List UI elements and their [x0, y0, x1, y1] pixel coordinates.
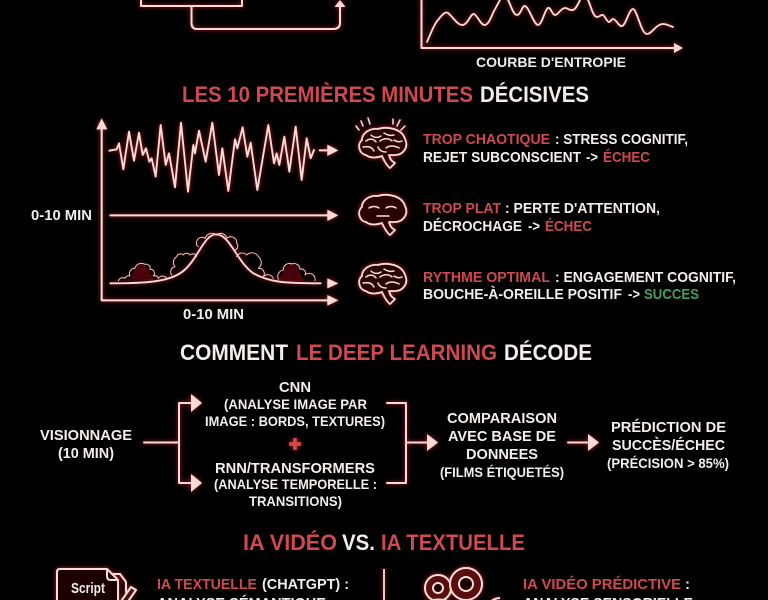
- icon: stressed brain: [356, 118, 406, 168]
- block: comparaison: [440, 410, 564, 480]
- block: rnn/transformers: [214, 460, 377, 509]
- block: cnn: IMAGE : BORDS, TEXTURES): [205, 413, 385, 429]
- text: trop plat: ->: [528, 218, 540, 235]
- text: rythme optimal: : ENGAGEMENT COGNITIF,: [555, 269, 736, 286]
- text: trop plat: : PERTE D'ATTENTION,: [505, 200, 660, 217]
- heading: ia vidéo vs. ia textuelle: VS.: [342, 530, 375, 555]
- text: trop chaotique: : STRESS COGNITIF,: [555, 131, 688, 148]
- icon: film camera: [425, 568, 500, 600]
- text: ia textuelle: [157, 576, 349, 600]
- axis label: courbe d'entropie: COURBE D'ENTROPIE: [476, 54, 626, 70]
- text: trop chaotique: ÉCHEC: [603, 149, 650, 166]
- block: prédiction: PRÉDICTION DE: [611, 419, 726, 436]
- chart lines: [96, 118, 338, 306]
- text: trop plat: TROP PLAT: [423, 200, 501, 217]
- flow: visionnage input: VISIONNAGE: [40, 427, 132, 444]
- flow: visionnage input: [40, 427, 132, 462]
- icon: engaged brain: [359, 264, 406, 304]
- text: ia textuelle: IA TEXTUELLE: [157, 576, 257, 593]
- heading: les 10 premières minutes décisives: LES 10 PREMIÈRES MINUTES: [182, 82, 473, 107]
- block: rnn/transformers: (ANALYSE TEMPORELLE :: [214, 476, 377, 492]
- plus sign: [289, 438, 301, 450]
- text: trop plat: [423, 200, 660, 235]
- heading: comment le deep learning décode: DÉCODE: [504, 340, 592, 365]
- block: prédiction: (PRÉCISION > 85%): [607, 455, 729, 471]
- text: rythme optimal: RYTHME OPTIMAL: [423, 269, 550, 286]
- heading: comment le deep learning décode: LE DEEP LEARNING: [296, 340, 497, 365]
- text: ia textuelle: (CHATGPT) :: [262, 576, 349, 593]
- heading: ia vidéo vs. ia textuelle: [243, 530, 525, 555]
- block: rnn/transformers: TRANSITIONS): [249, 493, 342, 509]
- chart: rhythm curves over 0-10 min: [31, 118, 338, 323]
- text: ia vidéo prédictive: :: [685, 576, 690, 593]
- block: rnn/transformers: RNN/TRANSFORMERS: [215, 460, 375, 477]
- heading: comment le deep learning décode: COMMENT: [180, 340, 288, 365]
- heading: les 10 premières minutes décisives: DÉCISIVES: [480, 82, 589, 107]
- icon: script document: Script: [71, 580, 105, 597]
- text: trop plat: ÉCHEC: [545, 218, 592, 235]
- text: trop chaotique: REJET SUBCONSCIENT: [423, 149, 581, 166]
- block: comparaison: AVEC BASE DE: [448, 428, 556, 445]
- text: trop chaotique: TROP CHAOTIQUE: [423, 131, 550, 148]
- text: trop chaotique: ->: [586, 149, 598, 166]
- icon: script document: [57, 569, 136, 600]
- heading: ia vidéo vs. ia textuelle: IA TEXTUELLE: [381, 530, 525, 555]
- flow: visionnage input: (10 MIN): [58, 445, 114, 462]
- text: ia vidéo prédictive: IA VIDÉO PRÉDICTIVE: [523, 576, 681, 593]
- block: prédiction: [607, 419, 729, 471]
- block: cnn: (ANALYSE IMAGE PAR: [224, 396, 367, 412]
- icon: bored brain: [359, 195, 406, 235]
- fractal detail on the bell curve: [118, 233, 315, 281]
- text: rythme optimal: ->: [628, 286, 640, 303]
- block: prédiction: SUCCÈS/ÉCHEC: [612, 437, 725, 454]
- arrows: flow connectors: [144, 394, 599, 492]
- heading: comment le deep learning décode: [180, 340, 592, 365]
- x axis label: 0-10 MIN: [183, 306, 244, 323]
- text: trop chaotique: [423, 131, 688, 166]
- text: trop plat: DÉCROCHAGE: [423, 218, 522, 235]
- block: cnn: CNN: [279, 379, 311, 396]
- block: comparaison: (FILMS ÉTIQUETÉS): [440, 464, 564, 480]
- flow diagram fragment at top: [141, 0, 346, 29]
- entropy curve chart: [422, 0, 683, 53]
- block: comparaison: COMPARAISON: [447, 410, 557, 427]
- block: cnn: [205, 379, 385, 429]
- divider: [383, 569, 385, 600]
- text: rythme optimal: [423, 269, 736, 303]
- heading: ia vidéo vs. ia textuelle: IA VIDÉO: [243, 530, 337, 555]
- y axis label: 0-10 MIN: [31, 207, 92, 224]
- text: rythme optimal: SUCCES: [644, 286, 699, 303]
- block: comparaison: DONNEES: [466, 446, 538, 463]
- text: ia vidéo prédictive: [523, 576, 693, 600]
- text: rythme optimal: BOUCHE-À-OREILLE POSITIF: [423, 286, 622, 303]
